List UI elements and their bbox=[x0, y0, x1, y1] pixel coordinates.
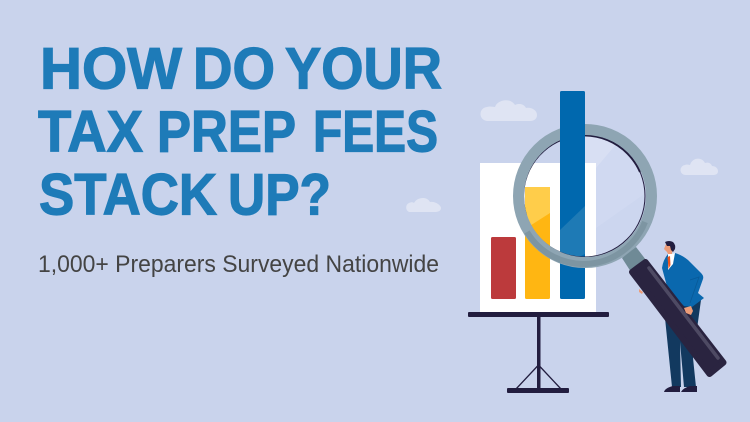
magnifier neck bbox=[622, 247, 646, 272]
title: TAX bbox=[38, 100, 143, 164]
infographic canvas bbox=[38, 46, 726, 393]
title: UP? bbox=[228, 162, 331, 228]
hand on handle bbox=[684, 306, 693, 315]
head bbox=[664, 244, 673, 254]
presentation board bbox=[468, 163, 609, 393]
left hand bbox=[639, 289, 643, 294]
board tray bbox=[468, 312, 609, 317]
lens inner rim bbox=[523, 135, 645, 257]
subtitle: 1,000+ Preparers Surveyed Nationwide bbox=[38, 251, 439, 278]
bar: blue bbox=[560, 130, 585, 299]
cloud: right bbox=[680, 159, 718, 175]
title: DO bbox=[193, 36, 275, 102]
title: FEES bbox=[313, 100, 438, 164]
shirt and tie bbox=[668, 253, 675, 270]
hair bbox=[665, 241, 675, 252]
board panel bbox=[480, 163, 596, 312]
title: YOUR bbox=[285, 36, 442, 102]
businessman bbox=[662, 241, 704, 392]
bar glare in lens bbox=[560, 206, 585, 258]
jacket bbox=[662, 253, 704, 307]
magnifier handle bbox=[632, 262, 724, 374]
magnifier ring bbox=[518, 130, 652, 264]
cloud: under title bbox=[406, 198, 441, 212]
bar: blue top bbox=[560, 91, 585, 157]
lens glass bbox=[525, 136, 615, 225]
title: STACK bbox=[39, 162, 217, 228]
shoes bbox=[664, 386, 697, 392]
bar: red bbox=[491, 237, 516, 299]
title: PREP bbox=[157, 100, 296, 164]
trousers bbox=[665, 300, 701, 387]
board stand bbox=[507, 317, 569, 393]
cloud: upper left bbox=[480, 100, 537, 121]
title: HOW bbox=[40, 36, 182, 102]
bar: yellow bbox=[525, 187, 550, 299]
title bbox=[38, 36, 442, 228]
sleeve line bbox=[690, 277, 699, 303]
